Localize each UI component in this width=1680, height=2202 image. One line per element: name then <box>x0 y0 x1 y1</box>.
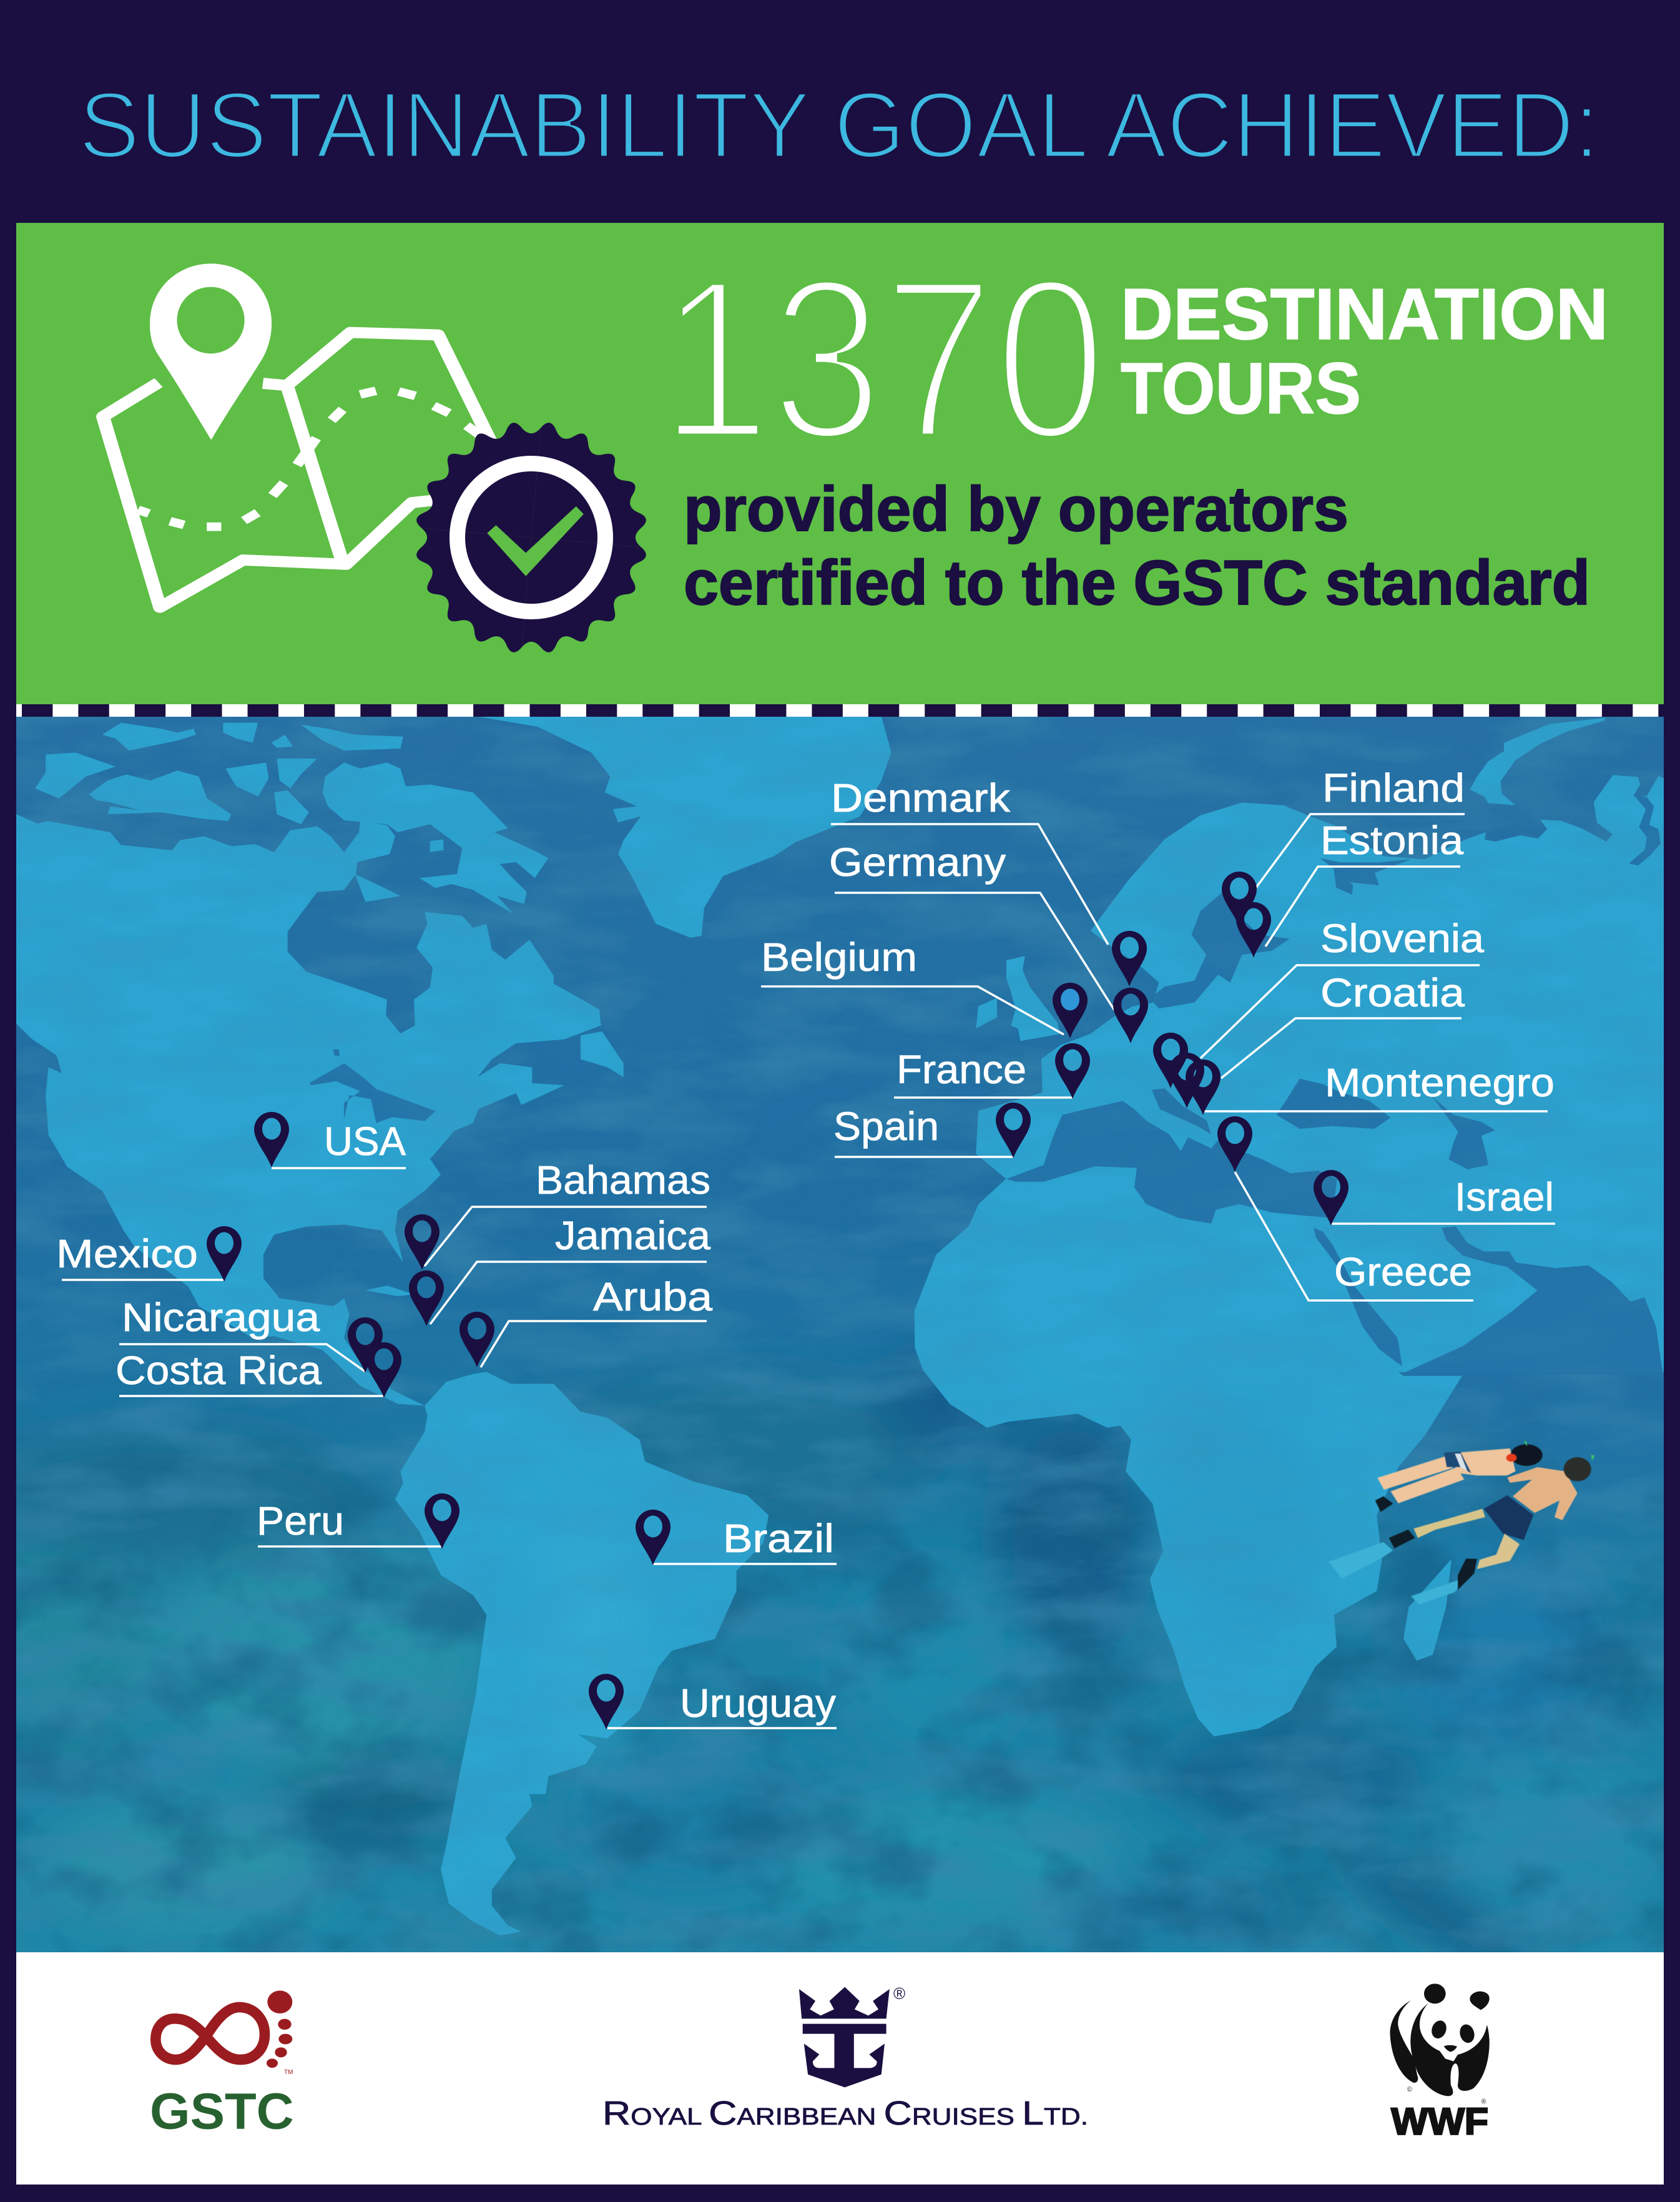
Jamaica <box>409 1213 710 1326</box>
icon: certified badge with check mark <box>416 423 646 652</box>
panel: green headline <box>16 223 1664 704</box>
Aruba <box>459 1274 712 1367</box>
logo: Royal Caribbean Cruises Ltd: ® <box>893 1984 905 2003</box>
Croatia <box>1169 970 1465 1108</box>
logo: Royal Caribbean Cruises Ltd: ROYAL CARIBBEAN CRUISES LTD. <box>602 2095 1088 2132</box>
subheading: provided by operators: provided by operators <box>684 474 1348 544</box>
France: France <box>896 1047 1026 1092</box>
USA: USA <box>324 1119 406 1164</box>
Belgium <box>761 935 1088 1038</box>
logo: GSTC: TM <box>284 2069 293 2076</box>
Denmark: Denmark <box>831 775 1011 820</box>
Peru: Peru <box>257 1498 344 1543</box>
India <box>1644 1312 1665 1374</box>
logo: WWF panda: ® <box>1481 2098 1486 2105</box>
British Isles <box>976 956 1060 1041</box>
France <box>894 1043 1090 1099</box>
Aruba: Aruba <box>593 1274 712 1319</box>
land masses <box>16 717 1674 1935</box>
Mexico <box>56 1226 242 1282</box>
Russia and Asia <box>1285 718 1664 1372</box>
Israel: Israel <box>1455 1174 1554 1219</box>
Brazil <box>636 1510 837 1565</box>
Belgium: Belgium <box>761 935 917 980</box>
checker divider <box>16 704 1664 717</box>
big number 1370: 1370 <box>659 230 1106 487</box>
Germany: Germany <box>829 840 1006 885</box>
Montenegro: Montenegro <box>1325 1060 1555 1105</box>
panel: partner logos <box>16 1952 1664 2185</box>
Uruguay: Uruguay <box>680 1681 836 1726</box>
Estonia <box>1236 818 1463 958</box>
Slovenia: Slovenia <box>1320 916 1484 961</box>
Greece: Greece <box>1334 1249 1472 1294</box>
subheading: provided by operators: certified to the GSTC standard <box>684 548 1590 618</box>
heading: destination tours: DESTINATION <box>1121 273 1608 355</box>
Uruguay <box>589 1674 837 1729</box>
Bahamas <box>405 1158 710 1270</box>
subheading: provided by operators <box>684 474 1590 618</box>
light water sheen on land <box>543 1398 1330 1786</box>
title: SUSTAINABILITY GOAL ACHIEVED: <box>79 72 1599 177</box>
Slovenia <box>1153 916 1484 1088</box>
heading: destination tours <box>1121 273 1608 429</box>
panel: world map over underwater photo <box>0 717 1674 1991</box>
photo: snorkelers <box>1316 1441 1594 1605</box>
Greece <box>1217 1116 1473 1300</box>
Spain <box>833 1103 1031 1158</box>
logo: WWF panda <box>1390 1983 1490 2142</box>
Bahamas: Bahamas <box>536 1158 710 1202</box>
Estonia: Estonia <box>1320 818 1463 863</box>
Mexico: Mexico <box>56 1231 198 1276</box>
Costa Rica: Costa Rica <box>115 1348 322 1393</box>
water backdrop <box>0 717 1664 1991</box>
Nicaragua: Nicaragua <box>122 1295 320 1340</box>
North America <box>16 717 892 1406</box>
USA <box>254 1112 406 1168</box>
Brazil: Brazil <box>723 1516 834 1561</box>
seas and lakes <box>309 795 1663 1375</box>
Nicaragua <box>119 1295 383 1373</box>
Europe <box>976 802 1461 1229</box>
Finland <box>1222 765 1465 927</box>
labels and pins: Europe and Middle East <box>761 765 1555 1300</box>
Germany <box>829 840 1148 1043</box>
Denmark <box>831 775 1147 986</box>
Costa Rica <box>115 1342 401 1398</box>
logo: WWF panda: WWF <box>1391 2100 1488 2142</box>
Jamaica: Jamaica <box>555 1213 710 1258</box>
Africa <box>915 1137 1478 1736</box>
South America <box>395 1372 769 1935</box>
Montenegro <box>1186 1059 1555 1115</box>
Israel <box>1314 1170 1555 1226</box>
heading: destination tours: TOURS <box>1121 348 1361 429</box>
Spain: Spain <box>833 1104 939 1149</box>
icon: folded map with location pin <box>103 263 491 607</box>
logo: WWF panda: © <box>1407 2086 1412 2093</box>
Finland: Finland <box>1322 765 1465 810</box>
Croatia: Croatia <box>1320 970 1465 1015</box>
labels and pins: Americas <box>56 1112 837 1729</box>
logo: Royal Caribbean Cruises Ltd <box>602 1984 1088 2132</box>
logo: GSTC: GSTC <box>150 2083 294 2140</box>
logo: GSTC <box>150 1990 294 2140</box>
Peru <box>257 1493 459 1549</box>
